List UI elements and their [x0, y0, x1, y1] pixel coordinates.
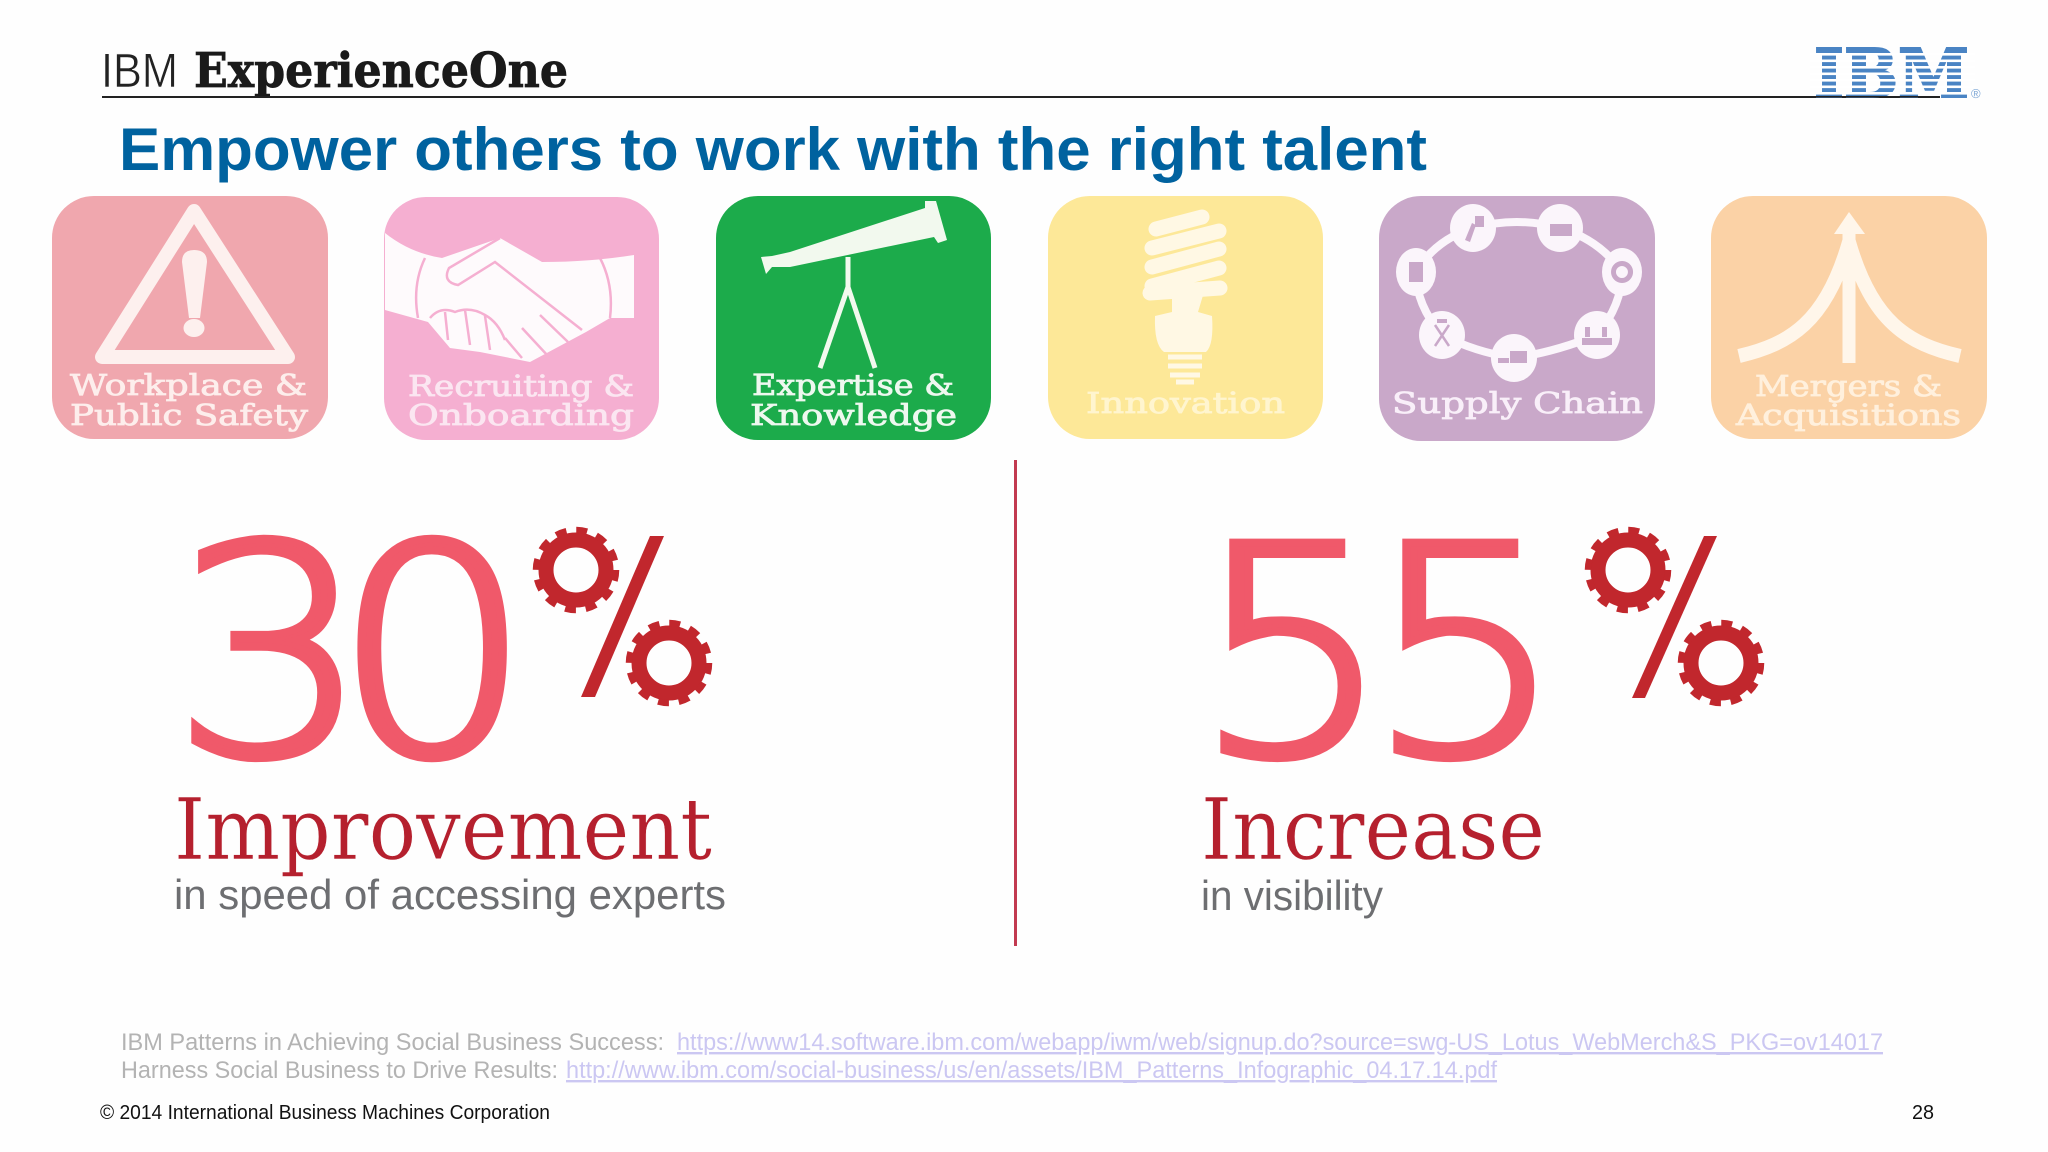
panel: 30% improvement stat — [172, 485, 726, 918]
big number 55: 55 — [1194, 485, 1564, 823]
copyright footer: © 2014 International Business Machines Corporation — [100, 1102, 550, 1124]
header: IBM ExperienceOne wordmark: IBM — [101, 45, 178, 98]
header: IBM ExperienceOne wordmark: ExperienceOne — [194, 43, 568, 99]
title: Empower others to work with the right talent — [119, 116, 1427, 183]
vertical divider — [1014, 460, 1017, 946]
source references: http://www.ibm.com/social-business/us/en/assets/IBM_Patterns_Infographic_04.17.14.pdf — [566, 1057, 1497, 1084]
tile label: Innovation — [1086, 386, 1285, 420]
stat description: in visibility — [1201, 872, 1383, 919]
big number 30: 30 — [172, 485, 531, 823]
panel: Expertise & Knowledge — [716, 196, 991, 440]
source references: Harness Social Business to Drive Results: — [121, 1057, 558, 1084]
icon: warning triangle — [102, 211, 288, 357]
tile label — [408, 369, 634, 432]
panel: Mergers & Acquisitions — [1711, 196, 1987, 439]
icon: light bulb — [1150, 217, 1220, 382]
tile label: Mergers & — [1755, 369, 1942, 403]
icon: handshake — [385, 233, 634, 362]
tile label — [1735, 369, 1961, 432]
source references — [121, 1029, 1883, 1084]
icon: merging arrow — [1739, 212, 1960, 363]
logo: IBM striped: IBM — [1814, 34, 1969, 113]
logo: IBM striped: ® — [1971, 86, 1981, 101]
icon: gear percent sign — [1588, 530, 1761, 703]
tile label: Workplace & — [70, 368, 307, 402]
tile label: Onboarding — [408, 398, 634, 432]
tile label: Acquisitions — [1735, 398, 1961, 432]
tile label: Public Safety — [70, 398, 309, 432]
panel: Recruiting & Onboarding — [384, 197, 659, 440]
tile label: Expertise & — [752, 368, 954, 402]
tile label — [70, 368, 309, 432]
tile label — [750, 368, 957, 432]
stat heading: Improvement — [174, 781, 712, 880]
stat description: in speed of accessing experts — [174, 871, 726, 918]
icon: supply chain ring — [1396, 204, 1642, 382]
stat heading: Increase — [1201, 781, 1545, 880]
panel: 55% increase stat — [1194, 485, 1761, 919]
tile label: Knowledge — [750, 398, 957, 432]
source references: https://www14.software.ibm.com/webapp/iwm/web/signup.do?source=swg-US_Lotus_WebMerch&S_PKG=ov14017 — [677, 1029, 1883, 1056]
tile label: Supply Chain — [1392, 386, 1643, 420]
header rule — [102, 96, 1940, 98]
icon: telescope — [761, 201, 947, 368]
source references: IBM Patterns in Achieving Social Business Success: — [121, 1029, 664, 1056]
panel: Innovation — [1048, 196, 1323, 439]
panel: Supply Chain — [1379, 196, 1655, 441]
panel: Workplace & Public Safety — [52, 196, 328, 439]
page number: 28 — [1912, 1102, 1934, 1124]
tile label: Recruiting & — [408, 369, 634, 403]
icon: gear percent sign — [536, 530, 709, 703]
